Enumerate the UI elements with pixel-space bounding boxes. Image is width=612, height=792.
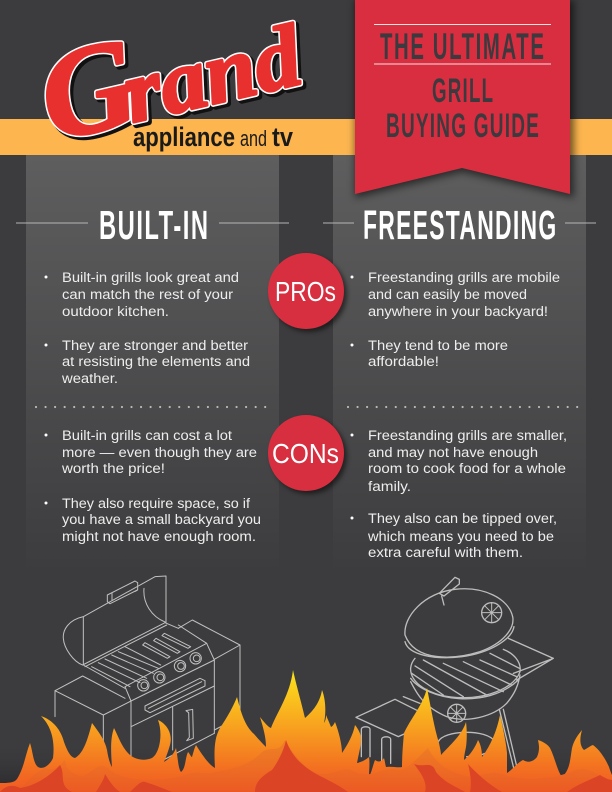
- grate and lid base: [83, 623, 207, 688]
- text: built-in pros: outdoor kitchen.: [62, 304, 169, 320]
- panel: built-in column: [26, 155, 279, 575]
- flames: [0, 670, 612, 792]
- icon: freestanding kettle grill: [356, 577, 553, 773]
- text: freestanding pros: and can easily be moved: [368, 287, 527, 303]
- lid handle: [439, 577, 459, 605]
- text: freestanding cons: extra careful with them.: [368, 545, 523, 561]
- logo script: Grand: Grand: [27, 0, 313, 168]
- text: built-in pros: They are stronger and better: [62, 338, 248, 354]
- left side table: [356, 697, 422, 737]
- middle flame layer: [20, 740, 612, 792]
- banner: the ultimate grill buying guide: [355, 0, 570, 194]
- text: built-in cons: might not have enough room.: [62, 529, 256, 545]
- burners: [143, 633, 191, 658]
- outer flame layer: [0, 670, 612, 792]
- text: built-in cons: They also require space, so if: [62, 496, 250, 512]
- text: built-in cons: [44, 428, 261, 545]
- logo: Grand appliance and tv: [27, 0, 315, 171]
- lid handle: [107, 581, 138, 604]
- logo script: Grand: Grand: [27, 0, 313, 168]
- text: built-in pros: weather.: [61, 371, 118, 387]
- banner title: GRILL: [432, 71, 493, 109]
- right side table: [508, 638, 553, 680]
- wheel: [448, 704, 466, 722]
- text: freestanding cons: and may not have enough: [368, 445, 538, 461]
- text: freestanding cons: family.: [368, 479, 411, 495]
- banner title: THE ULTIMATE: [380, 27, 544, 68]
- text: freestanding pros: [350, 270, 560, 370]
- text: freestanding cons: They also can be tipped over,: [368, 511, 557, 527]
- logo tagline: appliance: [133, 122, 235, 152]
- heading: freestanding: FREESTANDING: [363, 203, 556, 249]
- banner title: [380, 27, 544, 144]
- text: built-in pros: [44, 270, 250, 387]
- panel: freestanding column: [333, 155, 586, 575]
- text: built-in cons: worth the price!: [61, 461, 165, 477]
- oven doors: [131, 678, 214, 760]
- knobs: [138, 680, 149, 691]
- ground shadow behind flames: [0, 740, 612, 792]
- badge: PROs: PROs: [275, 276, 336, 307]
- text: built-in cons: more — even though they are: [62, 445, 257, 461]
- icon: built-in gas grill: [55, 576, 240, 760]
- logo tagline: tv: [272, 122, 293, 152]
- banner shadow: [355, 0, 574, 198]
- inner red flame shapes: [0, 740, 612, 792]
- text: built-in cons: Built-in grills can cost a lot: [62, 428, 232, 444]
- dome lid: [405, 589, 513, 657]
- text: freestanding cons: room to cook food for a whole: [368, 461, 566, 477]
- logo tagline: and: [240, 126, 267, 151]
- text: freestanding pros: They tend to be more: [368, 338, 508, 354]
- grate: [411, 649, 520, 698]
- text: built-in pros: Built-in grills look great and: [62, 270, 239, 286]
- heading: built-in: BUILT-IN: [99, 204, 208, 249]
- text: built-in pros: at resisting the elements and: [62, 354, 250, 370]
- text: freestanding pros: affordable!: [368, 354, 439, 370]
- text: freestanding pros: anywhere in your backyard!: [368, 304, 548, 320]
- logo script: Grand: Grand: [29, 0, 315, 170]
- lid vent: [482, 603, 502, 623]
- text: freestanding cons: [350, 428, 567, 561]
- text: built-in cons: you have a small backyard you: [62, 512, 261, 528]
- text: freestanding pros: Freestanding grills are mobile: [368, 270, 560, 286]
- door handle: [186, 709, 193, 741]
- badge: CONs: CONs: [272, 438, 339, 469]
- legs and lower ring: [361, 709, 518, 773]
- text: freestanding cons: Freestanding grills are smaller,: [368, 428, 567, 444]
- yellow band: [0, 119, 612, 155]
- grill lid: [63, 576, 166, 665]
- banner title: BUYING GUIDE: [386, 106, 539, 144]
- side boxes: [55, 620, 240, 760]
- text: built-in pros: can match the rest of your: [62, 287, 233, 303]
- text: freestanding cons: which means you need to be: [367, 529, 554, 545]
- badge: PROs: [268, 253, 347, 332]
- control panel: [125, 643, 214, 701]
- badge: CONs: [268, 415, 347, 494]
- bowl: [411, 675, 520, 719]
